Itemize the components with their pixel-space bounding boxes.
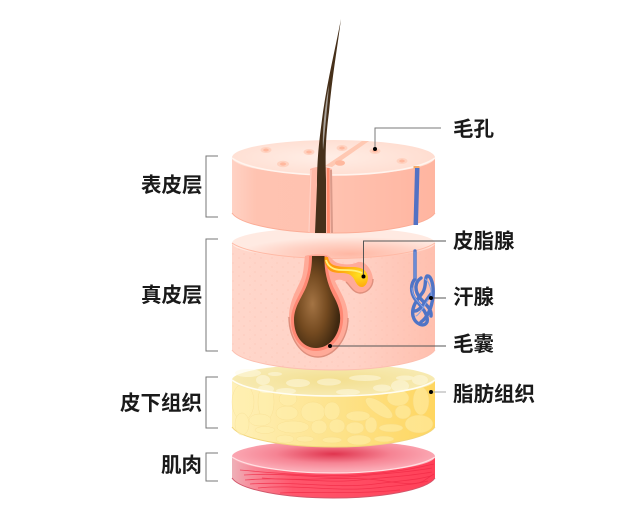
label: 皮下组织: 皮下组织 [120, 392, 202, 415]
hair bulb [294, 256, 340, 348]
layer: epidermis [232, 140, 435, 233]
hair [315, 19, 341, 233]
crack on surface [325, 141, 369, 167]
bracket: dermis [206, 239, 218, 351]
bracket: epidermis [206, 156, 218, 217]
bracket: muscle [206, 453, 218, 481]
skin pores [260, 145, 408, 167]
sebaceous gland [324, 257, 368, 287]
label: 毛囊: 毛囊 [453, 333, 494, 356]
layer: muscle [232, 440, 435, 498]
hair follicle [289, 254, 373, 357]
bracket: subcutaneous [206, 377, 218, 428]
layer: subcutaneous fat [232, 364, 435, 447]
line: follicle pointer [328, 344, 446, 348]
hair notch [309, 167, 333, 233]
label: 表皮层: 表皮层 [141, 174, 202, 197]
label: 毛孔: 毛孔 [453, 118, 494, 141]
sweat duct [414, 166, 420, 225]
follicle inner sheath [291, 256, 343, 351]
line: sweat gland pointer [429, 296, 446, 300]
layer: dermis [232, 228, 435, 370]
label: 皮脂腺: 皮脂腺 [453, 230, 515, 253]
label: 肌肉: 肌肉 [161, 454, 202, 477]
label: 汗腺: 汗腺 [453, 286, 494, 309]
line: fat pointer [429, 390, 446, 394]
line: sebaceous gland pointer [362, 241, 446, 278]
label: 脂肪组织: 脂肪组织 [453, 382, 535, 406]
follicle outer sheath [289, 254, 373, 357]
label: 真皮层: 真皮层 [141, 283, 202, 307]
sweat gland [412, 251, 433, 325]
line: pore pointer [373, 128, 441, 151]
